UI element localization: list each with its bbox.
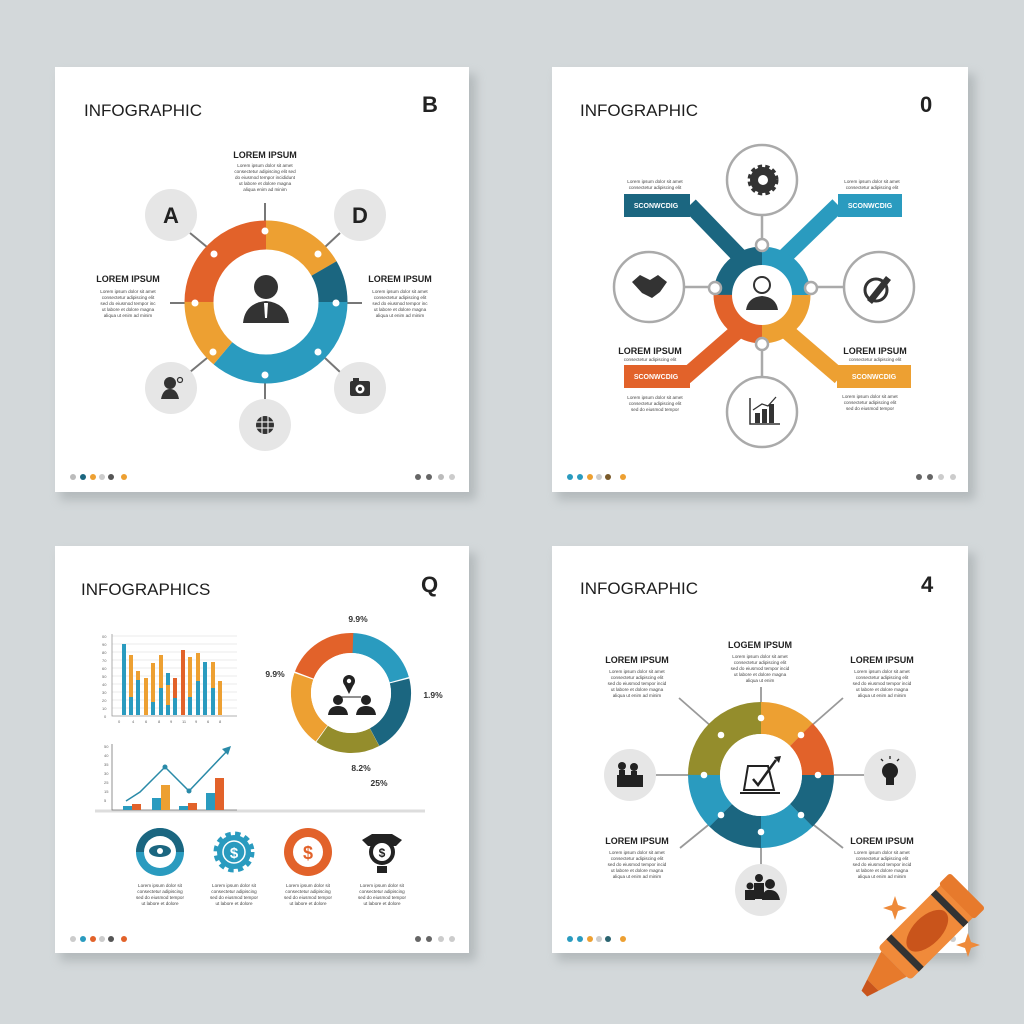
icon: chart circle bbox=[727, 377, 797, 447]
text block: top: sed do eiusmod tempor incid bbox=[731, 666, 790, 671]
bar chart bbox=[102, 634, 237, 724]
icon captions: Lorem ipsum dolor sit bbox=[138, 883, 183, 888]
text block: top-left bbox=[605, 655, 669, 698]
bar chart: 0 bbox=[104, 714, 107, 719]
text block: top: aliqua ut enim bbox=[746, 678, 774, 683]
panel: top-right hub infographic: Lorem ipsum dolor sit amet bbox=[627, 395, 683, 400]
text block: top: consectetur adipiscing elit bbox=[734, 660, 787, 665]
connectors bbox=[684, 215, 844, 377]
panel: top-left ring infographic bbox=[55, 67, 469, 492]
icon: group circle bbox=[604, 749, 656, 801]
box: bottom-right: SCONWCDIG bbox=[852, 374, 897, 381]
text block: bottom-right bbox=[850, 836, 914, 879]
panel: bottom-left charts: ut labore et dolore bbox=[363, 901, 401, 906]
line chart with bars: 5 bbox=[104, 798, 107, 803]
donut chart: 8.2% bbox=[351, 763, 371, 773]
text block: left: ut labore et dolore magna bbox=[102, 307, 155, 312]
icon: people circle bbox=[735, 864, 787, 916]
text block: bottom-right: Lorem ipsum dolor sit amet bbox=[854, 850, 910, 855]
corner badge 4: 4 bbox=[921, 572, 934, 597]
text block: top: aliqua enim ad minim bbox=[243, 187, 287, 192]
line chart with bars: 25 bbox=[104, 780, 109, 785]
icon: orange dollar bbox=[284, 828, 332, 876]
bar chart: 4 bbox=[132, 719, 135, 724]
donut chart: 25% bbox=[370, 778, 388, 788]
line chart with bars: 50 bbox=[104, 744, 109, 749]
text block: bottom-left: ut labore et dolore magna bbox=[611, 868, 664, 873]
text block: top-right: ut labore et dolore magna bbox=[856, 687, 909, 692]
text block: top-right: Lorem ipsum dolor sit amet bbox=[854, 669, 910, 674]
icon: pen circle bbox=[844, 252, 914, 322]
line chart with bars bbox=[95, 744, 425, 811]
title: INFOGRAPHIC bbox=[580, 579, 698, 598]
ring chart bbox=[680, 694, 842, 856]
bar chart: 11 bbox=[182, 719, 187, 724]
text block: top-right: aliqua ut enim ad minim bbox=[858, 693, 906, 698]
text block: left: Lorem ipsum dolor sit amet bbox=[100, 289, 156, 294]
text block: top: consectetur adipiscing elit sed bbox=[234, 169, 296, 174]
bar chart: 80 bbox=[102, 650, 107, 655]
donut chart: 1.9% bbox=[423, 690, 443, 700]
text block: left: sed do eiusmod tempor inc bbox=[100, 301, 156, 306]
text block: top-left: Lorem ipsum dolor sit amet bbox=[609, 669, 665, 674]
panel: top-right hub infographic: sed do eiusmod tempor bbox=[631, 407, 679, 412]
panel: top-right hub infographic: Lorem ipsum dolor sit amet bbox=[844, 179, 900, 184]
panel: bottom-left charts: sed do eiusmod tempor bbox=[284, 895, 332, 900]
panel: bottom-right ring infographic bbox=[552, 546, 968, 953]
bar chart: 8 bbox=[219, 719, 222, 724]
footer dots bbox=[567, 936, 956, 942]
box: bottom-left: SCONWCDIG bbox=[634, 374, 679, 381]
box: bottom-right bbox=[837, 365, 911, 388]
panel: top-right hub infographic: consectetur adipiscing elit bbox=[846, 185, 899, 190]
text block: top: LOREM IPSUM bbox=[233, 150, 297, 160]
panel: bottom-left charts: consectetur adipiscing bbox=[359, 889, 405, 894]
text block: top-right: consectetur adipiscing elit bbox=[856, 675, 909, 680]
text block: right: consectetur adipiscing elit bbox=[374, 295, 427, 300]
icon: person center bbox=[243, 275, 289, 323]
bar chart: 60 bbox=[102, 666, 107, 671]
title: INFOGRAPHICS bbox=[81, 580, 210, 599]
bar chart: 6 bbox=[145, 719, 148, 724]
icon: gear circle bbox=[727, 145, 797, 215]
text block: top: Lorem ipsum dolor sit amet bbox=[237, 163, 293, 168]
bar chart: 10 bbox=[102, 706, 107, 711]
text block: top-right: LOREM IPSUM bbox=[850, 655, 914, 665]
text block: right: ut labore et dolore magna bbox=[374, 307, 427, 312]
panel: top-right hub infographic: consectetur adipiscing elit bbox=[629, 401, 682, 406]
panel: top-right hub infographic: Lorem ipsum dolor sit amet bbox=[842, 394, 898, 399]
corner badge B: B bbox=[422, 92, 438, 117]
bar chart: 50 bbox=[102, 674, 107, 679]
panel: bottom-left charts: Lorem ipsum dolor sit bbox=[286, 883, 331, 888]
hub ring bbox=[723, 256, 801, 334]
text block: bottom-left: sed do eiusmod tempor incid bbox=[608, 862, 667, 867]
panel: bottom-left charts bbox=[55, 546, 469, 953]
spokes bbox=[170, 203, 362, 400]
text block: bottom-right: LOREM IPSUM bbox=[850, 836, 914, 846]
line chart with bars: 40 bbox=[104, 753, 109, 758]
icon: pin and people bbox=[328, 675, 376, 715]
text block: bottom-left: aliqua ut enim ad minim bbox=[613, 874, 661, 879]
footer dots bbox=[70, 936, 455, 942]
icon: lightbulb circle bbox=[864, 749, 916, 801]
circle D bbox=[334, 189, 386, 241]
footer dots bbox=[70, 474, 455, 480]
text block: bottom-right: sed do eiusmod tempor incid bbox=[853, 862, 912, 867]
icon: lightbulb dollar bbox=[362, 834, 402, 873]
text block: top: ut labore et dolore magna bbox=[734, 672, 787, 677]
title: INFOGRAPHIC bbox=[580, 101, 698, 120]
icon: globe bbox=[239, 399, 291, 451]
text block: left: LOREM IPSUM bbox=[96, 274, 160, 284]
text block: top: ut labore et dolore magna bbox=[239, 181, 292, 186]
box: bottom-left bbox=[624, 365, 690, 388]
circle D: D bbox=[352, 203, 368, 228]
text block: right: LOREM IPSUM bbox=[368, 274, 432, 284]
text block: top bbox=[728, 640, 792, 683]
title: INFOGRAPHIC bbox=[84, 101, 202, 120]
icon captions bbox=[136, 883, 184, 906]
text block: top-right bbox=[850, 655, 914, 698]
text block: bottom-left: LOREM IPSUM bbox=[605, 836, 669, 846]
text block: right bbox=[368, 274, 432, 318]
corner badge 0: 0 bbox=[920, 92, 932, 117]
icon: gear dollar bbox=[217, 835, 251, 869]
panel: bottom-left charts: sed do eiusmod tempor bbox=[210, 895, 258, 900]
panel: bottom-left charts: Lorem ipsum dolor sit bbox=[360, 883, 405, 888]
text block: top-right: sed do eiusmod tempor incid bbox=[853, 681, 912, 686]
line chart with bars: 35 bbox=[104, 762, 109, 767]
icon: camera bbox=[334, 362, 386, 414]
text block: right: sed do eiusmod tempor inc bbox=[372, 301, 428, 306]
bar chart: 20 bbox=[102, 698, 107, 703]
text block: left: aliqua ut enim ad minim bbox=[104, 313, 152, 318]
bar chart: 70 bbox=[102, 658, 107, 663]
text block: top-left: LOREM IPSUM bbox=[605, 655, 669, 665]
text block: top: Lorem ipsum dolor sit amet bbox=[732, 654, 788, 659]
bar chart: 30 bbox=[102, 690, 107, 695]
panel: top-right hub infographic: LOREM IPSUM bbox=[618, 346, 682, 356]
icon: eye badge bbox=[136, 828, 184, 876]
icon: handshake circle bbox=[614, 252, 684, 322]
donut chart: 9.9% bbox=[265, 669, 285, 679]
bar chart: 6 bbox=[207, 719, 210, 724]
bar chart: 00 bbox=[102, 634, 107, 639]
icon: person chat bbox=[145, 362, 197, 414]
sparkles bbox=[883, 896, 980, 957]
text block: left: consectetur adipiscing elit bbox=[102, 295, 155, 300]
icon: lightbulb dollar: $ bbox=[379, 846, 386, 860]
panel shadows bbox=[60, 74, 975, 961]
box: top-left: SCONWCDIG bbox=[634, 203, 679, 210]
circle A bbox=[145, 189, 197, 241]
icon: orange dollar: $ bbox=[303, 843, 313, 863]
icon captions: ut labore et dolore bbox=[141, 901, 179, 906]
donut chart bbox=[265, 614, 443, 788]
panel: bottom-left charts: sed do eiusmod tempor bbox=[358, 895, 406, 900]
icon: person center bbox=[754, 277, 770, 293]
line chart with bars: 30 bbox=[104, 771, 109, 776]
panel: top-right hub infographic bbox=[552, 67, 968, 492]
text block: bottom-left bbox=[605, 836, 669, 879]
text block: right: aliqua ut enim ad minim bbox=[376, 313, 424, 318]
panel: bottom-left charts: consectetur adipiscing bbox=[285, 889, 331, 894]
text block: top: LOGEM IPSUM bbox=[728, 640, 792, 650]
panel: bottom-left charts: ut labore et dolore bbox=[289, 901, 327, 906]
text block: top: do eiusmod tempor incididunt bbox=[235, 175, 296, 180]
text block: bottom-right: ut labore et dolore magna bbox=[856, 868, 909, 873]
text block: top-left: ut labore et dolore magna bbox=[611, 687, 664, 692]
text block: top-left: aliqua ut enim ad minim bbox=[613, 693, 661, 698]
bar chart: 9 bbox=[170, 719, 173, 724]
text block: bottom-left: consectetur adipiscing elit bbox=[611, 856, 664, 861]
panel: bottom-left charts: consectetur adipiscing bbox=[211, 889, 257, 894]
bar chart: 90 bbox=[102, 642, 107, 647]
panel: bottom-left charts: ut labore et dolore bbox=[215, 901, 253, 906]
text blocks bbox=[627, 179, 683, 190]
line chart with bars: 15 bbox=[104, 789, 109, 794]
icon captions: consectetur adipiscing bbox=[137, 889, 183, 894]
text block: left bbox=[96, 274, 160, 318]
text block: top bbox=[233, 150, 297, 192]
icon: gear dollar: $ bbox=[230, 845, 239, 862]
corner badge Q: Q bbox=[421, 572, 438, 597]
panel: top-right hub infographic: consectetur adipiscing elit bbox=[849, 357, 902, 362]
text block: bottom-right: aliqua ut enim ad minim bbox=[858, 874, 906, 879]
bar chart: 8 bbox=[158, 719, 161, 724]
panel: bottom-left charts: Lorem ipsum dolor sit bbox=[212, 883, 257, 888]
footer dots bbox=[567, 474, 956, 480]
bar chart: 0 bbox=[118, 719, 121, 724]
bar chart: 9 bbox=[195, 719, 198, 724]
ring chart bbox=[172, 208, 360, 396]
panel: top-right hub infographic: sed do eiusmod tempor bbox=[846, 406, 894, 411]
text block: top-left: consectetur adipiscing elit bbox=[611, 675, 664, 680]
text block: bottom-right: consectetur adipiscing elit bbox=[856, 856, 909, 861]
text block: bottom-left: Lorem ipsum dolor sit amet bbox=[609, 850, 665, 855]
arms bbox=[685, 205, 840, 377]
box: top-right: SCONWCDIG bbox=[848, 203, 893, 210]
icon: checked board bbox=[740, 760, 780, 793]
percentage labels: 9.9% bbox=[348, 614, 368, 624]
spokes bbox=[656, 687, 865, 868]
text blocks: Lorem ipsum dolor sit amet bbox=[627, 179, 683, 184]
text block: right: Lorem ipsum dolor sit amet bbox=[372, 289, 428, 294]
bar chart: 40 bbox=[102, 682, 107, 687]
box: top-left bbox=[624, 194, 690, 217]
panel: top-right hub infographic: LOREM IPSUM bbox=[843, 346, 907, 356]
panel: top-right hub infographic: consectetur adipiscing elit bbox=[844, 400, 897, 405]
crayon decoration bbox=[847, 873, 985, 1011]
circle A: A bbox=[163, 203, 179, 228]
panel: top-right hub infographic: consectetur adipiscing elit bbox=[624, 357, 677, 362]
text block: top-left: sed do eiusmod tempor incid bbox=[608, 681, 667, 686]
text blocks: consectetur adipiscing elit bbox=[629, 185, 682, 190]
box: top-right bbox=[838, 194, 902, 217]
icon captions: sed do eiusmod tempor bbox=[136, 895, 184, 900]
